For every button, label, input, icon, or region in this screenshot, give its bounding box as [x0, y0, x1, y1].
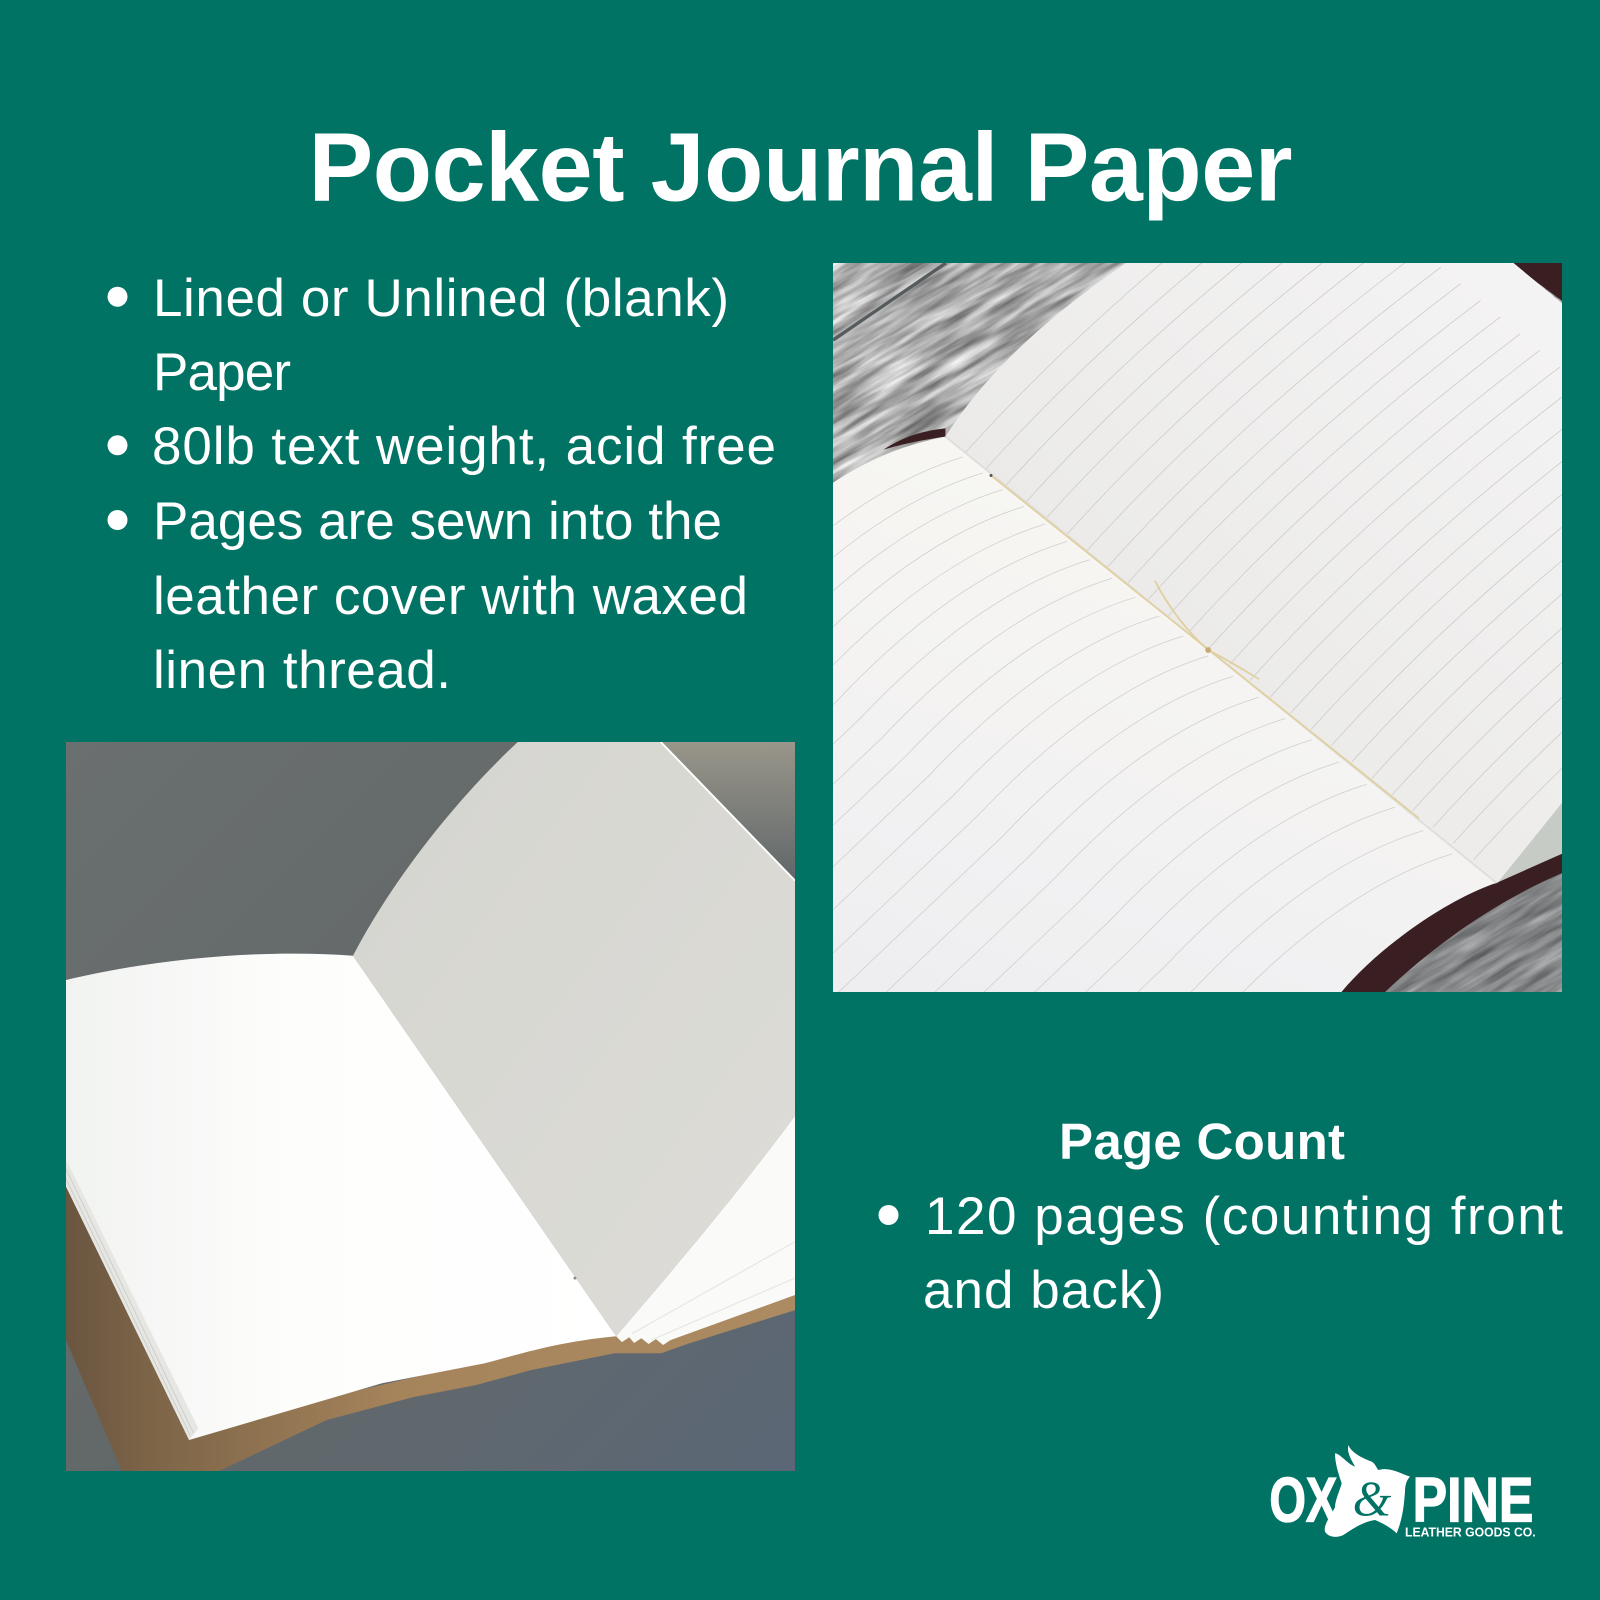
bullet: sewn pages: linen thread.: [153, 641, 451, 700]
darker wood corner: [1354, 851, 1562, 992]
grey facing page: [353, 742, 795, 1336]
blurred background corner: [661, 742, 795, 885]
small stitch hole: [573, 1277, 576, 1280]
page block edge: [1497, 800, 1562, 883]
bullet: 120 pages: and back): [923, 1261, 1164, 1320]
bullet: 120 pages: 120 pages (counting front: [925, 1187, 1563, 1246]
photo: open lined journal on wood: [833, 263, 1562, 992]
bullet: sewn pages: leather cover with waxed: [153, 567, 748, 626]
wood table texture: [351, 0, 1600, 1492]
right lined page: [945, 263, 1562, 883]
left lined page: [833, 437, 1497, 992]
page count block: [878, 1113, 1563, 1320]
white right pages: [616, 1116, 795, 1345]
photo: open blank journal on slate: [66, 742, 795, 1471]
wood plank crack: [833, 263, 946, 340]
gutter shadow: [945, 437, 1497, 883]
title: Pocket Journal Paper: [308, 112, 1292, 222]
bullet list: paper features: [108, 269, 776, 700]
dark leather cover corners: [883, 263, 1562, 992]
bull head silhouette: [1325, 1445, 1410, 1537]
bullet: lined or unlined: [108, 269, 729, 402]
logo ampersand: &: [1353, 1470, 1391, 1526]
bullet: 120 pages: [878, 1187, 1563, 1320]
white left page: [66, 954, 616, 1440]
page count heading: Page Count: [1059, 1113, 1345, 1170]
logo: Ox & Pine Leather Goods Co.: [1269, 1445, 1536, 1540]
bullet: text weight: 80lb text weight, acid free: [152, 417, 776, 476]
bullet: sewn pages: [108, 492, 748, 700]
top page edge highlight: [661, 742, 795, 881]
left page rule lines: [833, 456, 1452, 992]
bullet: lined or unlined: Paper: [153, 343, 291, 402]
bullet: sewn pages: Pages are sewn into the: [153, 492, 722, 551]
waxed linen thread: [990, 474, 1419, 818]
page stack edges: [66, 1159, 198, 1440]
logo wordmark OX: OX: [1269, 1466, 1337, 1536]
right page rule lines: [966, 263, 1562, 860]
bullet: lined or unlined: Lined or Unlined (blank): [153, 269, 729, 328]
brown leather cover: [66, 1181, 795, 1471]
